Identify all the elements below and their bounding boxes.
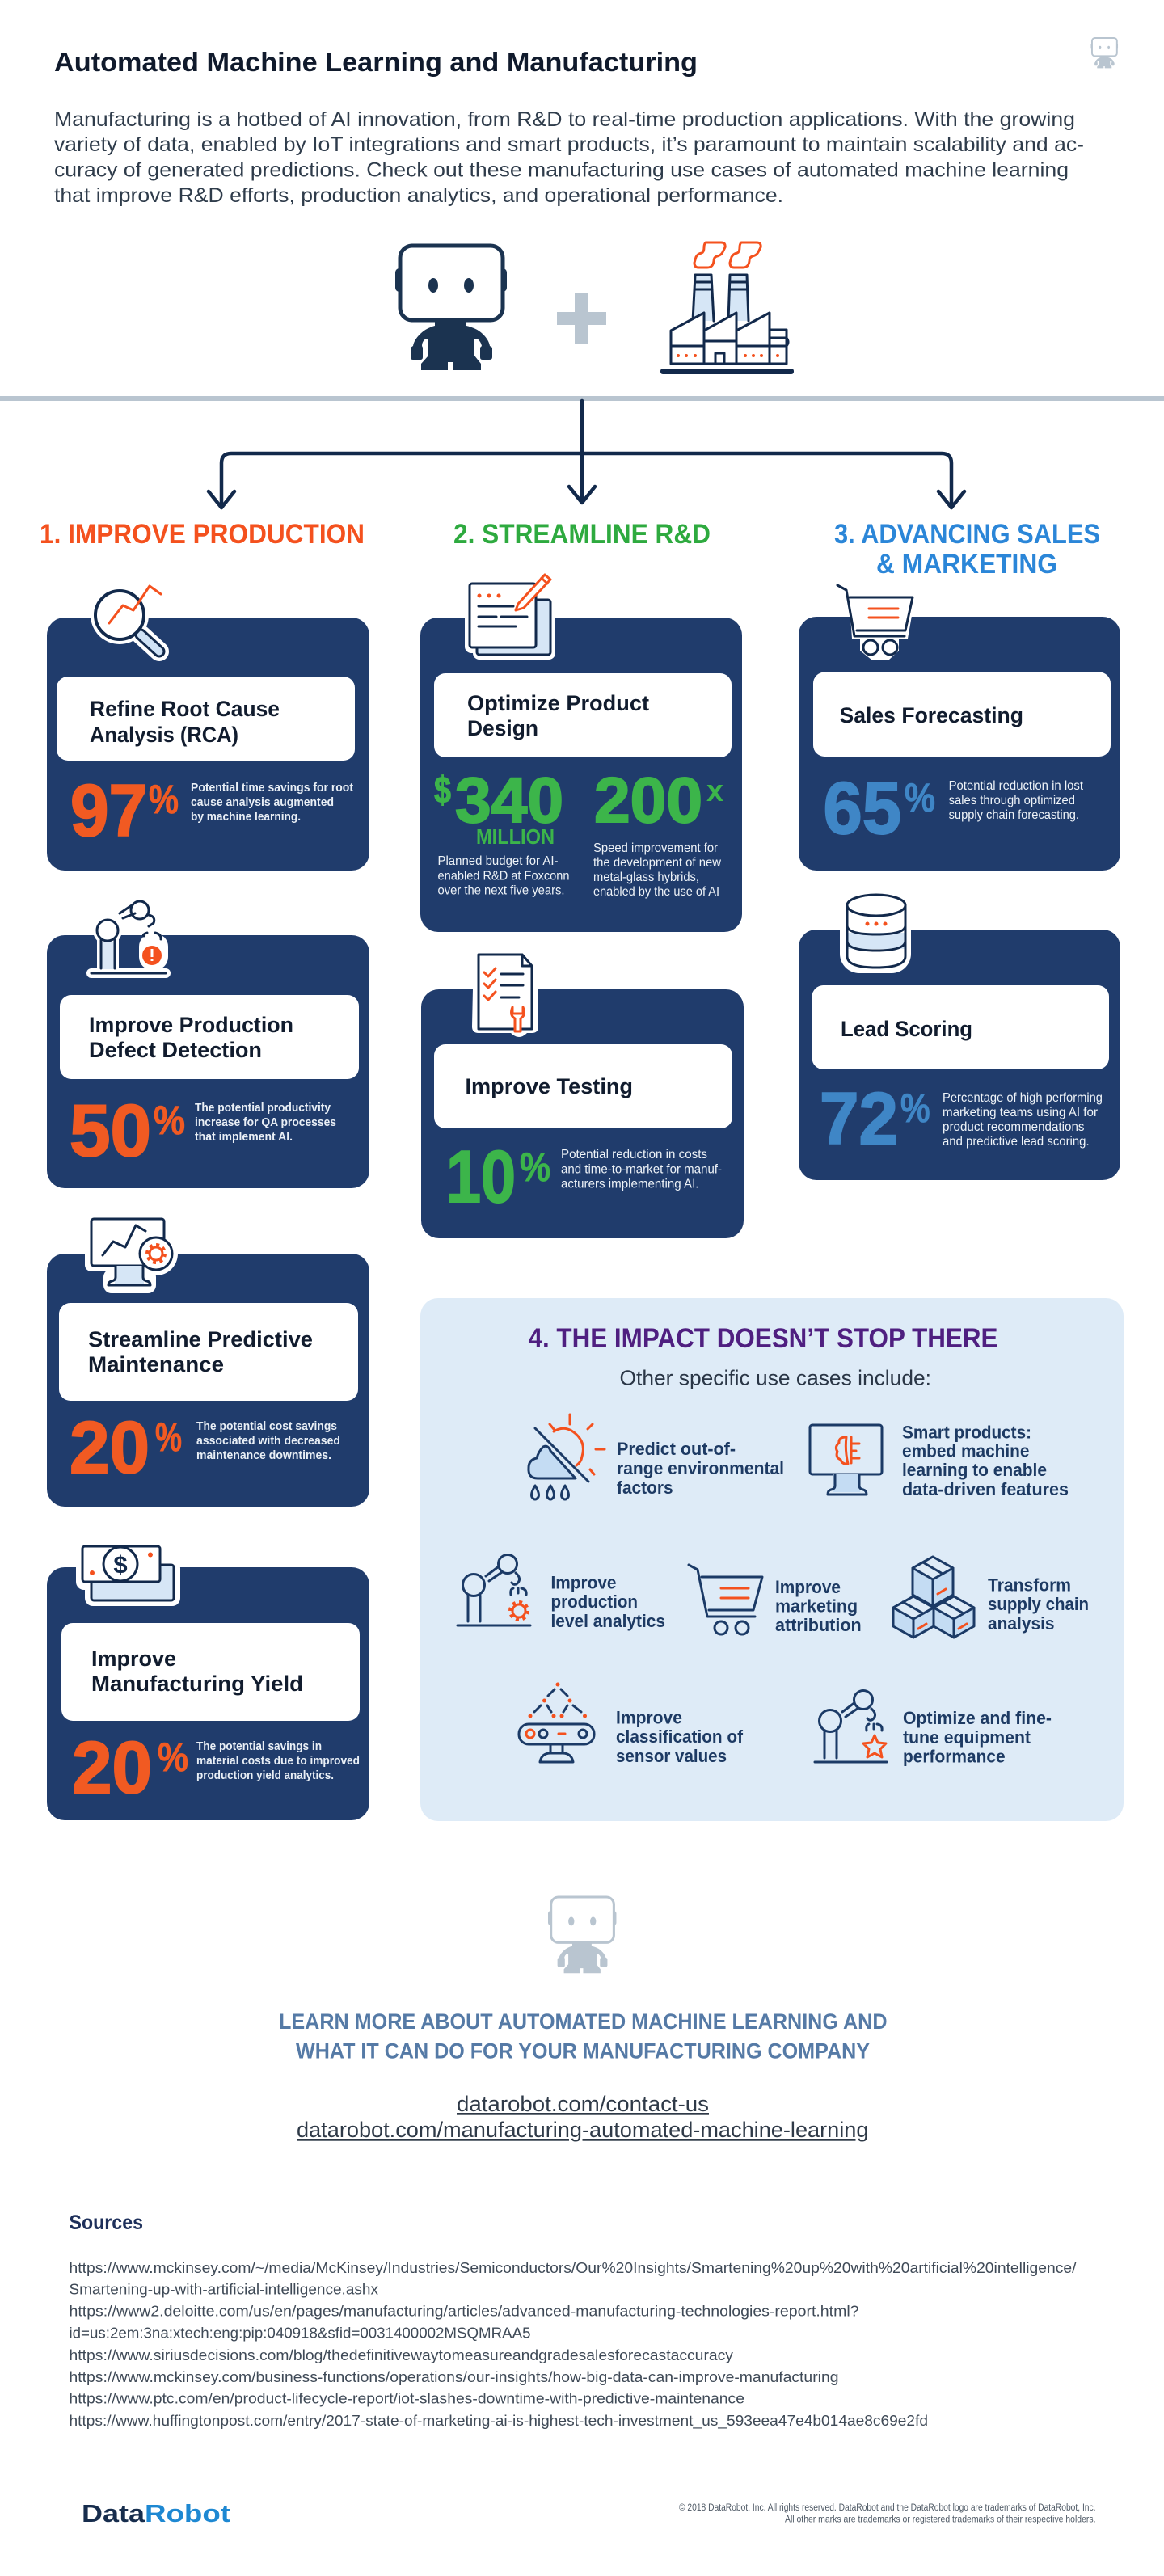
sources list: Smartening-up-with-artificial-intelligence.ashx [70, 2281, 378, 2297]
stat description [196, 1419, 340, 1462]
icon: stacked boxes [893, 1557, 974, 1638]
stat: 20%: % [155, 1414, 182, 1460]
stat: 50%: % [154, 1098, 185, 1143]
icon: robot arm with alert [86, 898, 171, 978]
card title: Lead Scoring [841, 1017, 972, 1041]
stat: $340 million: MILLION [476, 824, 555, 849]
stat: 20%: % [158, 1735, 188, 1780]
intro paragraph: curacy of generated predictions. Check out these manufacturing use cases of automated machine learning [54, 158, 1069, 181]
icon: database [840, 895, 911, 973]
stat: 20%: 20 [72, 1727, 152, 1809]
use case: marketing attribution [775, 1577, 862, 1635]
card title: Refine Root Cause [90, 697, 280, 721]
sources list: https://www.huffingtonpost.com/entry/2017-state-of-marketing-ai-is-highest-tech-investment_us_593eea47e4b014ae8c69e2fd [70, 2413, 928, 2430]
card title box [57, 677, 355, 761]
call to action links: datarobot.com/contact-us [457, 2092, 709, 2116]
stat: 65%: % [905, 775, 935, 820]
stat description: The potential cost savings [196, 1419, 337, 1433]
stat: 10%: % [520, 1145, 550, 1190]
stat description: metal-glass hybrids: metal-glass hybrids, [593, 871, 699, 884]
card title box [812, 985, 1109, 1069]
intro paragraph: variety of data, enabled by IoT integrations and smart products, it’s paramount to maintain scalability and ac- [54, 133, 1084, 156]
use case: supply chain [988, 1575, 1089, 1634]
card title box [813, 672, 1111, 757]
stat description [943, 1091, 1103, 1149]
stat: 72%: 72 [820, 1078, 898, 1160]
card title: Improve Production [89, 1013, 293, 1037]
call to action links [297, 2092, 868, 2142]
card title [467, 691, 649, 740]
stat description: Potential time savings for root [191, 781, 353, 795]
panel: improve production defect detection [47, 898, 369, 1188]
use case: equipment performance: tune equipment [903, 1727, 1031, 1748]
use case: smart products: data-driven features [902, 1479, 1069, 1499]
stat description: The potential savings in [196, 1739, 322, 1753]
card title: Maintenance [88, 1352, 224, 1377]
stat description [949, 779, 1084, 822]
card title: Optimize Product [467, 691, 649, 715]
card title [89, 1013, 293, 1062]
stat description: product recommendations [943, 1120, 1085, 1134]
use case: marketing attribution: Improve [775, 1577, 841, 1597]
stat description: foxconn budget [438, 854, 569, 897]
icon: robot arm with star [815, 1691, 887, 1762]
DataRobot logo [82, 2499, 230, 2528]
stat: $340 million: 340 [455, 764, 563, 836]
title: Automated Machine Learning and Manufacturing [54, 47, 698, 77]
panel: improve testing [421, 951, 744, 1238]
stat: 97%: 97 [70, 770, 147, 852]
icon: small robot logo top right [1091, 38, 1118, 68]
use case: sensor values [616, 1707, 744, 1766]
icon: magnifier with trend line [91, 586, 161, 651]
use case: supply chain: supply chain [988, 1594, 1089, 1614]
stat description: by machine learning. [191, 810, 301, 824]
panel: streamline predictive maintenance [47, 1215, 369, 1507]
stat description: marketing teams using AI for [943, 1106, 1099, 1119]
card title: Improve [91, 1646, 176, 1671]
stat description: foxconn budget: over the next five years. [438, 884, 564, 897]
sources list: id=us:2em:3na:xtech:eng:pip:040918&sfid=0031400002MSQMRAA5 [70, 2325, 530, 2341]
panel: refine root cause analysis [47, 586, 369, 871]
panel: lead scoring [799, 895, 1120, 1180]
use case: smart products: Smart products: [902, 1423, 1031, 1442]
panel: improve manufacturing yield [47, 1540, 369, 1820]
use case: sensor values: classification of [616, 1726, 744, 1747]
stat: 10%: 10 [446, 1136, 516, 1218]
stat: 72%: % [900, 1086, 930, 1131]
stat: $340 million [434, 764, 563, 849]
card title box [59, 1303, 358, 1401]
icon: banknotes: $ [113, 1550, 128, 1579]
icon: robot arm with gear [458, 1555, 530, 1625]
heading: 3. advancing sales & marketing: 3. ADVANCING SALES [834, 519, 1100, 550]
stat description: acturers implementing AI. [561, 1177, 698, 1191]
heading: 2. streamline R&D: 2. STREAMLINE R&D [453, 519, 711, 550]
use case: marketing attribution: marketing [775, 1596, 858, 1617]
copyright notice: © 2018 DataRobot, Inc. All rights reserved. DataRobot and the DataRobot logo are trademarks of DataRobot, Inc. [679, 2503, 1096, 2513]
card title: Analysis (RCA) [90, 723, 238, 747]
stat description: increase for QA processes [195, 1115, 336, 1129]
icon: monitor with brain [810, 1425, 882, 1495]
stat description: maintenance downtimes. [196, 1448, 331, 1462]
stat description: sales through optimized [949, 794, 1075, 807]
use case: equipment performance [903, 1708, 1052, 1767]
heading: 3. advancing sales & marketing [834, 519, 1100, 580]
icon: grey robot [548, 1897, 616, 1973]
stat description: metal-glass hybrids [593, 841, 721, 899]
heading: 1. improve production: 1. IMPROVE PRODUCTION [40, 519, 365, 550]
use case: equipment performance: performance [903, 1746, 1006, 1767]
copyright notice [679, 2503, 1096, 2525]
use case: production analytics [551, 1573, 665, 1631]
stat description: production yield analytics. [196, 1769, 334, 1782]
card title box [434, 1044, 732, 1128]
card title: Defect Detection [89, 1038, 262, 1062]
use case: production analytics: production [551, 1592, 638, 1612]
icon: factory [660, 242, 794, 374]
use case: environmental factors: Predict out-of- [617, 1439, 736, 1459]
stat description: Potential reduction in costs [561, 1148, 707, 1162]
divider line [0, 396, 1164, 401]
icon: checklist with wrench [472, 951, 538, 1037]
card title: Manufacturing Yield [91, 1672, 303, 1696]
sources list: https://www.siriusdecisions.com/blog/thedefinitivewaytomeasureandgradesalesforecastaccuracy [70, 2347, 733, 2363]
stat: 200x: 200 [594, 764, 702, 836]
icon: weather [529, 1414, 605, 1499]
stat description [561, 1148, 722, 1191]
icon: cart [689, 1565, 762, 1634]
stat description [191, 781, 353, 824]
stat: 20%: 20 [70, 1407, 150, 1489]
call to action heading [279, 2009, 888, 2063]
card title: Design [467, 716, 538, 740]
icon: large robot [395, 246, 507, 370]
stat description: material costs due to improved [196, 1754, 360, 1768]
use case: environmental factors: factors [617, 1478, 673, 1498]
call to action heading: WHAT IT CAN DO FOR YOUR MANUFACTURING COMPANY [296, 2038, 870, 2063]
card title [90, 697, 280, 747]
arrows: branching to three sections [209, 401, 964, 508]
use case: environmental factors: range environmental [617, 1458, 784, 1478]
sources list [70, 2260, 1077, 2430]
panel: the impact doesn't stop there [420, 1298, 1124, 1821]
use case: environmental factors [617, 1439, 784, 1498]
card title [91, 1646, 303, 1696]
call to action links: datarobot.com/manufacturing-automated-machine-learning [297, 2118, 868, 2142]
stat: 200x: x [706, 774, 723, 808]
use case: sensor values: Improve [616, 1707, 682, 1728]
stat description: metal-glass hybrids: enabled by the use of AI [593, 885, 719, 899]
card title: Improve Testing [466, 1074, 633, 1098]
use case: supply chain: Transform [988, 1575, 1071, 1596]
stat description: and time-to-market for manuf- [561, 1162, 722, 1177]
panel: optimize product design [420, 575, 742, 932]
stat description: foxconn budget: Planned budget for AI- [438, 854, 558, 868]
card title box [60, 995, 359, 1079]
card title: Sales Forecasting [839, 703, 1023, 727]
stat: $340 million: $ [434, 769, 451, 811]
use case: equipment performance: Optimize and fine- [903, 1708, 1052, 1728]
sources list: https://www.ptc.com/en/product-lifecycle-report/iot-slashes-downtime-with-predictive-maintenance [70, 2391, 744, 2407]
intro paragraph: Manufacturing is a hotbed of AI innovation, from R&D to real-time production applications. With the growing [54, 108, 1075, 131]
stat: 50%: 50 [70, 1090, 151, 1172]
use case: smart products [902, 1423, 1069, 1499]
sources list: https://www.mckinsey.com/business-functions/operations/our-insights/how-big-data-can-improve-manufacturing [70, 2369, 839, 2385]
stat description: supply chain forecasting. [949, 808, 1079, 822]
stat description: and predictive lead scoring. [943, 1135, 1090, 1149]
use case: production analytics: level analytics [551, 1611, 665, 1631]
intro paragraph [54, 108, 1084, 207]
use case: production analytics: Improve [551, 1573, 616, 1592]
sources list: https://www2.deloitte.com/us/en/pages/manufacturing/articles/advanced-manufacturing-technologies-report.html? [70, 2304, 858, 2320]
icon: banknotes [76, 1540, 180, 1606]
stat description: foxconn budget: enabled R&D at Foxconn [438, 870, 569, 883]
stat description: The potential productivity [195, 1101, 331, 1115]
use case: marketing attribution: attribution [775, 1615, 862, 1635]
use case: sensor values: sensor values [616, 1746, 727, 1766]
copyright notice: All other marks are trademarks or registered trademarks of their respective holders. [785, 2515, 1096, 2525]
heading: 4. the impact: 4. THE IMPACT DOESN’T STOP THERE [529, 1323, 997, 1354]
stat description: metal-glass hybrids: Speed improvement for [593, 841, 719, 855]
subheading: Other specific use cases include: [619, 1366, 931, 1390]
icon: shopping cart [837, 585, 916, 660]
panel: sales forecasting [799, 585, 1120, 871]
stat description: cause analysis augmented [191, 795, 334, 809]
heading: 3. advancing sales & marketing: & MARKETING [876, 549, 1057, 580]
DataRobot logo: Data [82, 2499, 146, 2528]
stat description: that implement AI. [195, 1130, 293, 1144]
stat description [195, 1101, 336, 1144]
stat: 65%: 65 [823, 768, 901, 850]
card title: Streamline Predictive [88, 1327, 313, 1351]
card title box [61, 1623, 360, 1721]
icon: document with pencil [465, 575, 555, 660]
use case: supply chain: analysis [988, 1613, 1054, 1634]
call to action heading: LEARN MORE ABOUT AUTOMATED MACHINE LEARNING AND [279, 2009, 888, 2034]
stat description: associated with decreased [196, 1434, 340, 1448]
stat description [196, 1739, 360, 1782]
icon: plus sign [557, 293, 606, 344]
use case: smart products: embed machine [902, 1440, 1030, 1461]
stat description: metal-glass hybrids: the development of new [593, 856, 721, 870]
sources heading: Sources [70, 2211, 143, 2234]
card title [88, 1327, 313, 1377]
icon: sensor with dotted tree [519, 1683, 594, 1762]
icon: monitor with gear [85, 1215, 178, 1293]
DataRobot logo: Robot [145, 2499, 230, 2528]
sources list: https://www.mckinsey.com/~/media/McKinsey/Industries/Semiconductors/Our%20Insights/Smartening%20up%20with%20artificial%20intelligence/ [70, 2260, 1077, 2276]
card title box [434, 673, 732, 757]
intro paragraph: that improve R&D efforts, production analytics, and operational performance. [54, 184, 783, 207]
stat description: Potential reduction in lost [949, 779, 1084, 793]
stat description: Percentage of high performing [943, 1091, 1103, 1105]
use case: smart products: learning to enable [902, 1460, 1047, 1480]
stat: 97%: % [149, 777, 179, 822]
